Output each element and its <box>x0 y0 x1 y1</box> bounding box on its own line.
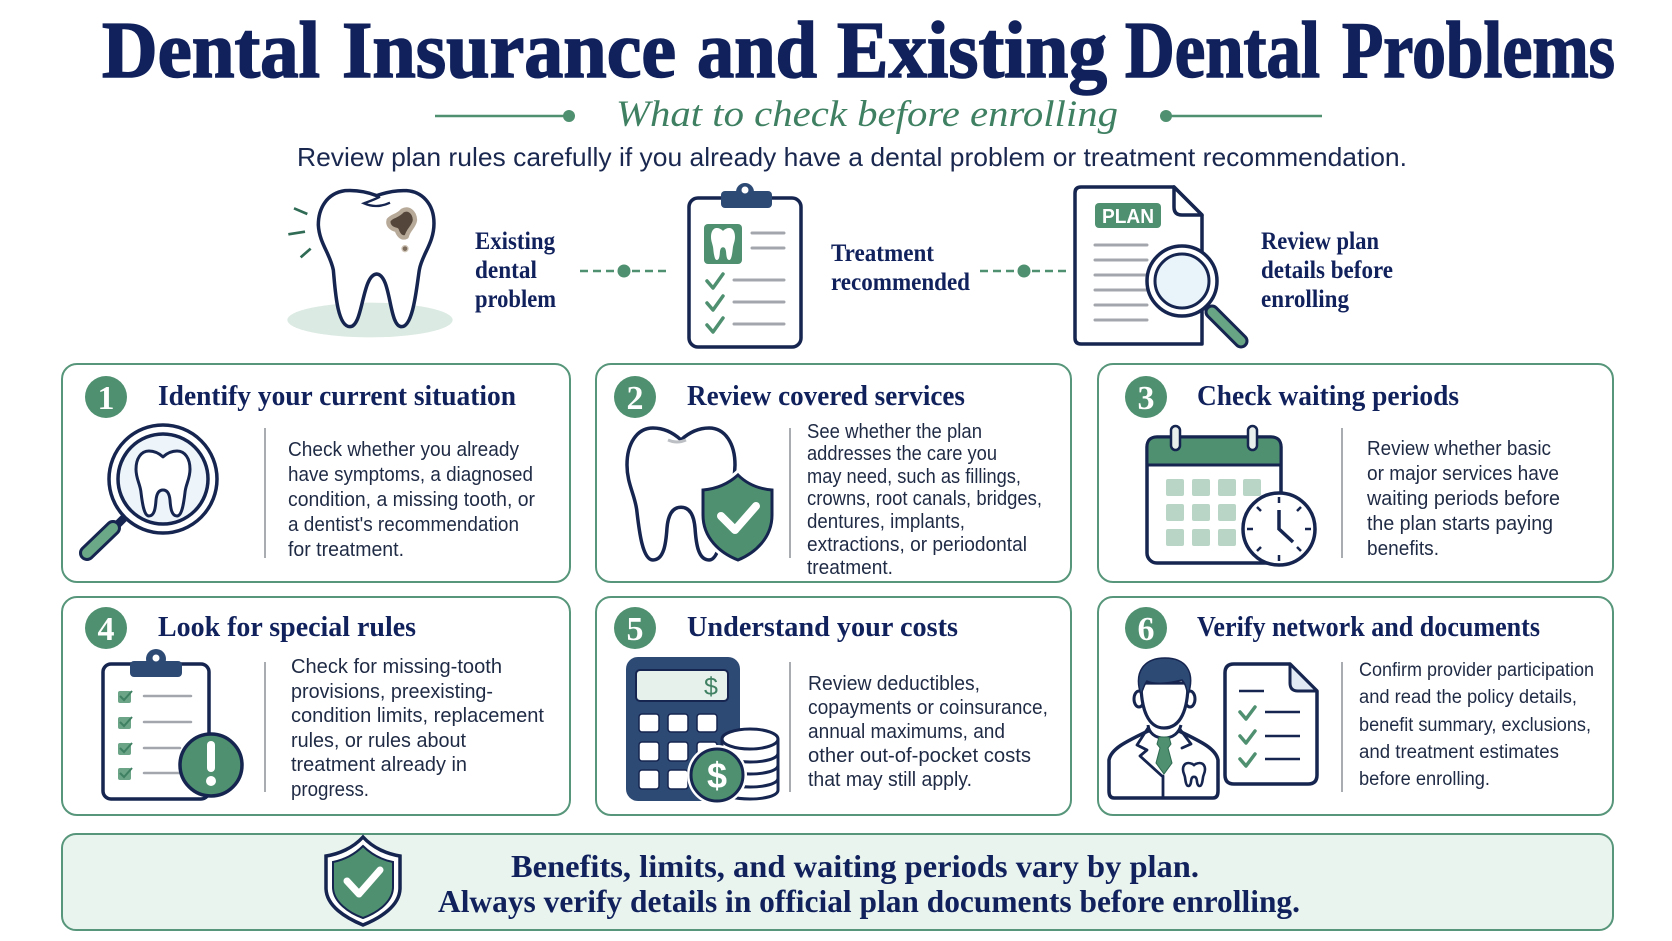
text 4: rules, or rules about <box>291 730 466 752</box>
label: review plan details <box>1261 228 1393 313</box>
text 5: other out-of-pocket costs <box>808 745 1031 767</box>
arrow: dashed connector 2 <box>980 264 1067 278</box>
icon: calculator with coins: $ <box>704 673 718 701</box>
text 6: benefit summary, exclusions, <box>1359 715 1591 736</box>
title: and <box>697 7 817 95</box>
label: treatment recommended <box>831 240 970 296</box>
title <box>102 7 1615 95</box>
icon: calculator with coins: $ <box>707 755 727 796</box>
heading 4: Look for special rules <box>158 611 416 643</box>
label: review plan details: details before <box>1261 257 1393 284</box>
title: Problems <box>1342 7 1615 95</box>
text 6 <box>1359 660 1594 790</box>
title: Existing <box>837 7 1107 95</box>
number badge 5 <box>614 607 656 649</box>
text 1: Check whether you already <box>288 439 519 461</box>
label: existing dental problem <box>475 228 556 313</box>
subtitle with flanking lines: What to check before enrolling <box>616 94 1118 135</box>
number badge 3: 3 <box>1138 380 1154 417</box>
intro sentence: Review plan rules carefully if you already have a dental problem or treatment recommendation. <box>297 142 1407 172</box>
text 2: extractions, or periodontal <box>807 534 1027 556</box>
text 1 <box>288 439 535 561</box>
icon: tooth with decay <box>287 191 453 337</box>
panel: 6 verify network and documents <box>1098 597 1613 815</box>
icon: tooth with shield <box>627 428 772 560</box>
heading 6: Verify network and documents <box>1197 611 1540 643</box>
text 2 <box>807 421 1042 579</box>
number badge 3 <box>1125 376 1167 418</box>
text 3 <box>1366 438 1560 560</box>
text 2: See whether the plan <box>807 421 982 443</box>
label: review plan details: Review plan <box>1261 228 1379 255</box>
icon: plan document with magnifier: PLAN <box>1102 206 1154 228</box>
text 2: treatment. <box>807 557 893 579</box>
text 6: Confirm provider participation <box>1359 660 1594 681</box>
icon: footer shield <box>326 837 400 925</box>
number badge 1: 1 <box>98 380 114 417</box>
label: existing dental problem: problem <box>475 286 556 313</box>
text 2: addresses the care you <box>807 443 997 465</box>
text 6: before enrolling. <box>1359 769 1490 790</box>
text 4: Check for missing-tooth <box>291 656 502 678</box>
panel: 1 identify your current situation <box>62 364 570 582</box>
text 1: a dentist's recommendation <box>288 514 519 536</box>
text 1: have symptoms, a diagnosed <box>288 464 533 486</box>
label: existing dental problem: Existing <box>475 228 555 255</box>
text 2: crowns, root canals, bridges, <box>807 488 1042 510</box>
text 4: treatment already in <box>291 754 467 776</box>
text 3: Review whether basic <box>1367 438 1551 460</box>
icon: dentist figure <box>1109 658 1218 798</box>
number badge 6: 6 <box>1138 611 1154 648</box>
label: existing dental problem: dental <box>475 257 537 284</box>
text 6: and read the policy details, <box>1359 687 1577 708</box>
text 4: condition limits, replacement <box>291 705 544 727</box>
number badge 4: 4 <box>98 611 114 648</box>
text 5: that may still apply. <box>808 769 972 791</box>
text 3: benefits. <box>1367 538 1439 560</box>
number badge 2: 2 <box>626 380 644 417</box>
subtitle with flanking lines <box>435 94 1322 135</box>
label: review plan details: enrolling <box>1261 286 1349 313</box>
icon: checklist document <box>1225 664 1317 784</box>
arrow: dashed connector 1 <box>580 264 668 278</box>
text 1: for treatment. <box>288 539 404 561</box>
title: Dental <box>1125 7 1320 95</box>
heading 5: Understand your costs <box>687 611 958 643</box>
text 6: and treatment estimates <box>1359 742 1559 763</box>
text 2: may need, such as fillings, <box>807 466 1021 488</box>
text 5: annual maximums, and <box>808 721 1005 743</box>
text 5 <box>808 673 1048 791</box>
title: Dental <box>102 7 320 95</box>
title: Insurance <box>342 7 676 95</box>
heading 1: Identify your current situation <box>158 380 516 412</box>
text 3: or major services have <box>1367 463 1559 485</box>
icon: clipboard with tooth <box>689 183 801 347</box>
text 4 <box>291 656 544 801</box>
footer text <box>438 848 1300 919</box>
text 3: waiting periods before <box>1366 488 1560 510</box>
panel: 5 understand your costs <box>596 597 1071 815</box>
number badge 2 <box>614 376 656 418</box>
number badge 1 <box>85 376 127 418</box>
panel: 4 look for special rules <box>62 597 570 815</box>
icon: calendar with clock <box>1147 426 1315 565</box>
panel: 2 review covered services <box>596 364 1071 582</box>
icon: plan document with magnifier <box>1075 187 1241 344</box>
heading 3: Check waiting periods <box>1197 380 1459 412</box>
text 3: the plan starts paying <box>1367 513 1553 535</box>
number badge 6 <box>1125 607 1167 649</box>
icon: clipboard with alert <box>103 649 242 799</box>
text 4: progress. <box>291 779 369 801</box>
label: treatment recommended: recommended <box>831 269 970 296</box>
text 5: Review deductibles, <box>808 673 980 695</box>
footer text: Benefits, limits, and waiting periods vary by plan. <box>511 848 1199 884</box>
number badge 4 <box>85 607 127 649</box>
icon: magnifier over tooth <box>87 425 217 553</box>
text 4: provisions, preexisting- <box>291 681 493 703</box>
panel: 3 check waiting periods <box>1098 364 1613 582</box>
text 5: copayments or coinsurance, <box>808 697 1048 719</box>
callout: footer banner <box>62 834 1613 930</box>
footer text: Always verify details in official plan documents before enrolling. <box>438 883 1300 919</box>
number badge 5: 5 <box>626 611 644 648</box>
text 1: condition, a missing tooth, or <box>288 489 535 511</box>
label: treatment recommended: Treatment <box>831 240 935 267</box>
text 2: dentures, implants, <box>807 511 965 533</box>
icon: calculator with coins <box>626 657 778 805</box>
heading 2: Review covered services <box>687 380 965 412</box>
